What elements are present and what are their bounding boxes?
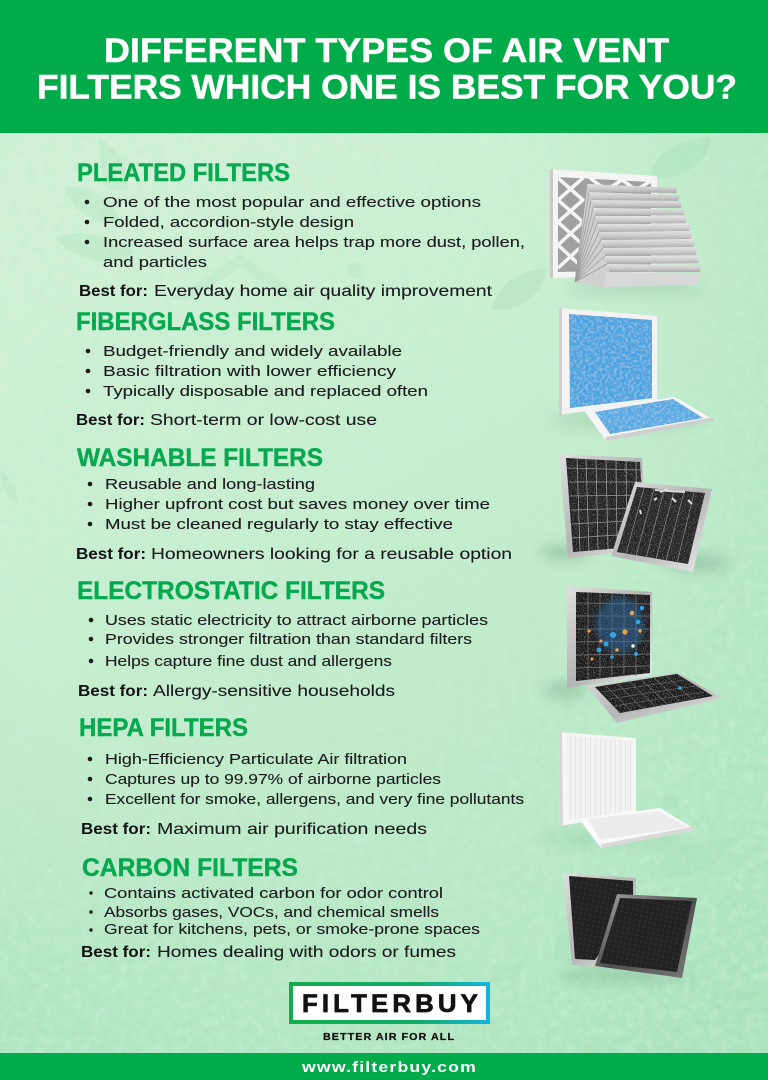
logo <box>289 982 490 1043</box>
logo: BETTER AIR FOR ALL <box>323 1031 455 1043</box>
panel: fiberglass filters text: FIBERGLASS FILTERS <box>76 308 335 336</box>
panel: electrostatic filters text <box>77 577 488 700</box>
panel: washable filters text: Must be cleaned regularly to stay effective <box>105 517 453 533</box>
panel: electrostatic filters text: Provides stronger filtration than standard filters <box>105 632 472 648</box>
panel: carbon filters text <box>81 854 480 961</box>
icon: hepa filter <box>540 732 696 848</box>
panel: hepa filters text: Excellent for smoke, allergens, and very fine pollutants <box>105 792 524 808</box>
panel: fiberglass filters text: Budget-friendly and widely available <box>103 344 402 360</box>
panel: carbon filters text: Absorbs gases, VOCs, and chemical smells <box>104 905 439 921</box>
panel: hepa filters text: Best for: <box>81 821 151 838</box>
panel: hepa filters text: HEPA FILTERS <box>79 714 248 742</box>
panel: pleated filters text: Increased surface area helps trap more dust, pollen, <box>103 235 525 251</box>
panel: washable filters text: Reusable and long-lasting <box>105 477 315 493</box>
panel: fiberglass filters text: Typically disposable and replaced often <box>103 384 428 400</box>
icon: washable filter <box>541 454 730 572</box>
panel: electrostatic filters text: Best for: <box>78 683 148 700</box>
icon: carbon filter <box>557 873 697 981</box>
panel: fiberglass filters text: Short-term or low-cost use <box>150 412 377 429</box>
panel: pleated filters text: PLEATED FILTERS <box>77 159 290 187</box>
title: FILTERS WHICH ONE IS BEST FOR YOU? <box>37 68 737 106</box>
panel: pleated filters text: Everyday home air quality improvement <box>154 283 493 300</box>
footer band <box>0 1053 768 1080</box>
panel: pleated filters text: Best for: <box>79 283 148 300</box>
panel: hepa filters text: Captures up to 99.97% of airborne particles <box>105 772 441 788</box>
panel: hepa filters text <box>79 714 524 838</box>
icon: fiberglass filter <box>550 308 714 441</box>
logo: FILTERBUY <box>302 990 482 1018</box>
panel: washable filters text: Homeowners looking for a reusable option <box>151 546 512 563</box>
panel: fiberglass filters text: Basic filtration with lower efficiency <box>103 364 397 380</box>
panel: carbon filters text: Great for kitchens, pets, or smoke-prone spaces <box>104 922 480 938</box>
panel: pleated filters text: and particles <box>103 255 207 271</box>
panel: pleated filters text <box>77 159 525 300</box>
footer band: www.filterbuy.com <box>301 1059 477 1076</box>
panel: washable filters text: WASHABLE FILTERS <box>77 444 323 472</box>
title <box>37 32 737 106</box>
panel: electrostatic filters text: ELECTROSTATIC FILTERS <box>77 577 385 605</box>
panel: fiberglass filters text <box>76 308 428 429</box>
panel: washable filters text <box>76 444 512 563</box>
panel: hepa filters text: Maximum air purification needs <box>157 821 427 838</box>
icon: electrostatic filter <box>543 586 723 723</box>
panel: pleated filters text: One of the most popular and effective options <box>103 195 481 211</box>
header band <box>0 0 768 133</box>
panel: fiberglass filters text: Best for: <box>76 412 145 429</box>
icon: pleated filter <box>550 169 705 294</box>
panel: electrostatic filters text: Allergy-sensitive households <box>153 683 395 700</box>
panel: pleated filters text: Folded, accordion-style design <box>103 215 354 231</box>
panel: electrostatic filters text: Uses static electricity to attract airborne particles <box>105 613 488 629</box>
panel: carbon filters text: Homes dealing with odors or fumes <box>157 944 456 961</box>
panel: washable filters text: Best for: <box>76 546 146 563</box>
panel: carbon filters text: Best for: <box>81 944 151 961</box>
panel: carbon filters text: CARBON FILTERS <box>82 854 298 882</box>
panel: carbon filters text: Contains activated carbon for odor control <box>104 886 443 902</box>
title: DIFFERENT TYPES OF AIR VENT <box>104 32 669 70</box>
panel: electrostatic filters text: Helps capture fine dust and allergens <box>105 654 392 670</box>
panel: hepa filters text: High-Efficiency Particulate Air filtration <box>105 752 407 768</box>
panel: washable filters text: Higher upfront cost but saves money over time <box>105 497 490 513</box>
